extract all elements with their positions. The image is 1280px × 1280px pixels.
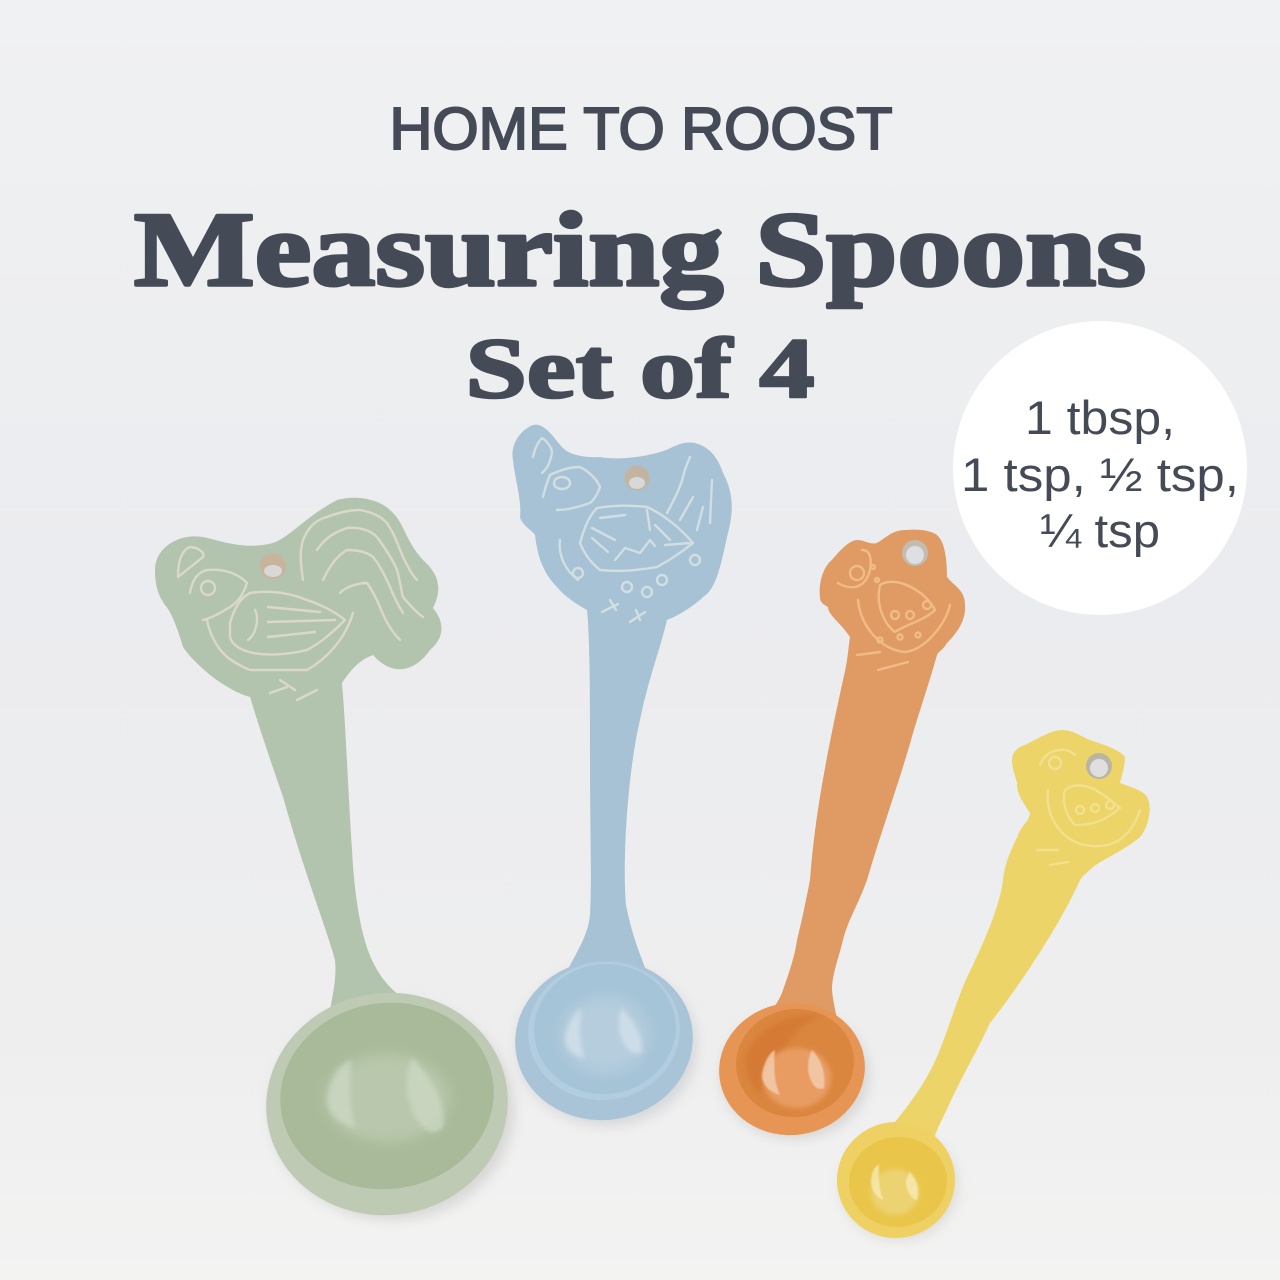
hole — [624, 466, 650, 490]
green rooster spoon — [155, 498, 522, 1231]
callout: sizes — [953, 321, 1247, 615]
bowl — [832, 1117, 960, 1243]
callout: sizes: ¼ tsp — [1040, 504, 1160, 557]
subtitle: Set of 4 — [466, 320, 814, 416]
emboss chick — [1037, 750, 1140, 865]
emboss hen — [533, 438, 712, 622]
yellow chick spoon — [832, 730, 1150, 1243]
bowl — [711, 993, 873, 1145]
eyebrow heading: HOME TO ROOST — [390, 96, 892, 162]
hole — [902, 540, 928, 566]
emboss rooster — [178, 510, 423, 700]
orange chick spoon — [711, 530, 965, 1145]
emboss chick — [838, 550, 950, 670]
callout: sizes: 1 tsp, ½ tsp, — [961, 448, 1239, 501]
hole — [260, 553, 286, 579]
bowl — [505, 948, 703, 1132]
hole — [1086, 753, 1112, 779]
title: Measuring Spoons — [134, 191, 1146, 308]
bowl — [252, 977, 522, 1231]
blue hen spoon — [505, 425, 732, 1132]
callout: sizes: 1 tbsp, — [1025, 391, 1175, 444]
